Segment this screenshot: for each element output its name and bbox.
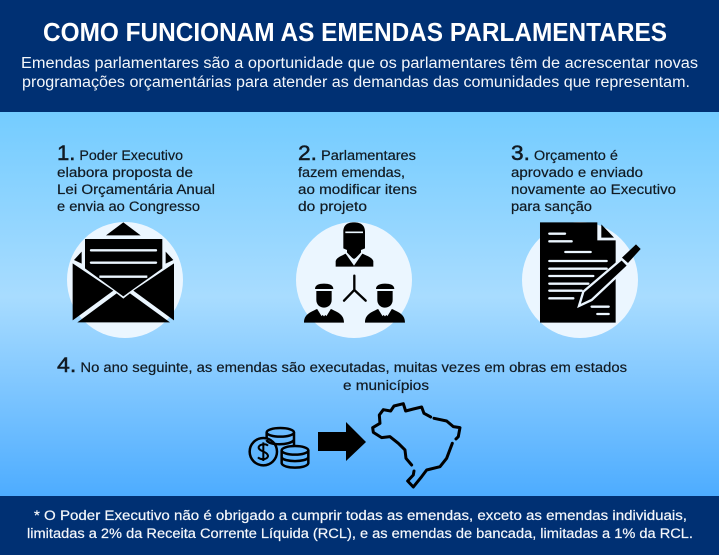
step 2 text: fazem emendas, bbox=[298, 165, 405, 180]
step 1 text: Lei Orçamentária Anual bbox=[57, 182, 215, 197]
step 3 text bbox=[511, 142, 676, 214]
step 2 text: ao modificar itens bbox=[298, 182, 417, 197]
icon: coins bbox=[250, 428, 308, 468]
intro text bbox=[21, 55, 698, 91]
step 4 text: e municípios bbox=[343, 378, 429, 393]
intro text: programações orçamentárias para atender as demandas das comunidades que representam. bbox=[22, 74, 690, 91]
step 1 text: 1. Poder Executivo bbox=[57, 142, 183, 165]
step 4 text: 4. No ano seguinte, as emendas são executadas, muitas vezes em obras em estados bbox=[57, 354, 627, 377]
step 2 text: do projeto bbox=[298, 199, 367, 214]
step 1 text bbox=[57, 142, 215, 214]
step 1 text: e envia ao Congresso bbox=[57, 199, 200, 214]
panel: header bbox=[0, 0, 719, 112]
panel: footer note bbox=[0, 496, 719, 555]
icon: woman bbox=[336, 222, 373, 267]
icon: connector bbox=[344, 276, 366, 301]
title: COMO FUNCIONAM AS EMENDAS PARLAMENTARES bbox=[43, 19, 667, 47]
icon: open envelope on circle bbox=[67, 222, 183, 338]
step 1 text: elabora proposta de bbox=[57, 165, 193, 180]
step 3 text: novamente ao Executivo bbox=[511, 182, 676, 197]
icon: man right bbox=[365, 284, 405, 323]
icon: man left bbox=[304, 284, 344, 323]
step 4 text bbox=[57, 354, 627, 393]
panel: footer note: * O Poder Executivo não é obrigado a cumprir todas as emendas, exceto as emendas individuais, bbox=[34, 508, 687, 523]
intro text: Emendas parlamentares são a oportunidade que os parlamentares têm de acrescentar novas bbox=[21, 55, 698, 72]
step 3 text: aprovado e enviado bbox=[511, 165, 643, 180]
step 3 text: 3. Orçamento é bbox=[511, 142, 618, 165]
step 2 text: 2. Parlamentares bbox=[298, 142, 416, 165]
panel: footer note: limitadas a 2% da Receita Corrente Líquida (RCL), e as emendas de bancada, limitadas a 1% da RCL. bbox=[27, 526, 693, 541]
icon: three people on circle bbox=[296, 222, 412, 338]
panel: gradient background bbox=[0, 112, 719, 497]
icon: document and pen on circle bbox=[522, 222, 641, 338]
step 2 text bbox=[298, 142, 417, 214]
icon: map of Brazil bbox=[373, 404, 460, 487]
step 3 text: para sanção bbox=[511, 199, 592, 214]
arrow bbox=[318, 422, 366, 461]
